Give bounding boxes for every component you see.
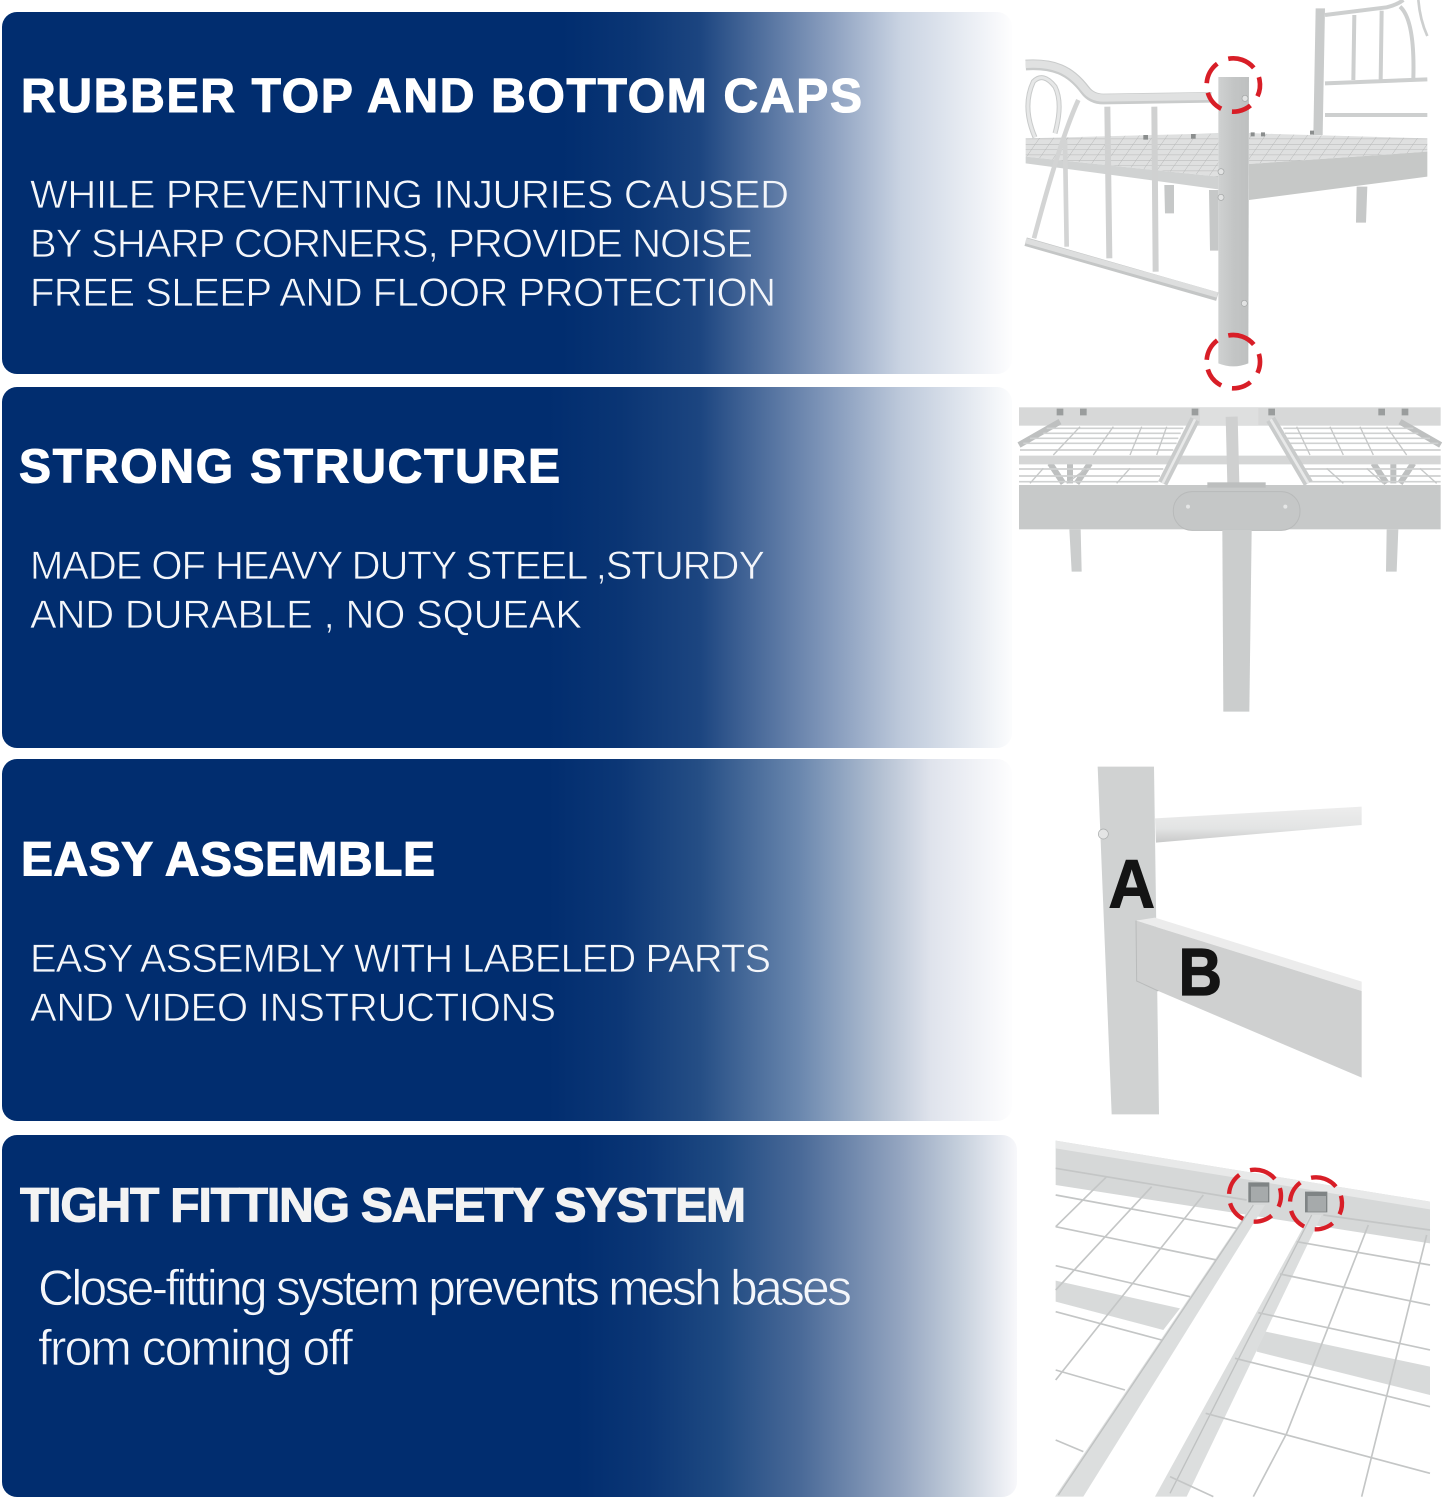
heading: rubber caps: RUBBER TOP AND BOTTOM CAPS (21, 70, 862, 123)
text block: strong structure description (30, 544, 765, 637)
text block: easy assemble description (30, 937, 771, 1030)
heading: easy assemble: EASY ASSEMBLE (21, 834, 435, 886)
label B: B (1179, 936, 1222, 1010)
callout: left slot dashed circle (1225, 1165, 1285, 1226)
text block: rubber caps description: WHILE PREVENTING INJURIES CAUSED (30, 173, 789, 217)
callout: right slot dashed circle (1286, 1173, 1346, 1234)
label A: A (1108, 847, 1155, 923)
illustration: center support frame (1019, 407, 1441, 712)
heading: tight fitting safety system: TIGHT FITTING SAFETY SYSTEM (20, 1180, 746, 1232)
illustration: mesh base fitting slots (1055, 1141, 1430, 1497)
text block: tight fitting description: Close-fitting system prevents mesh bases (38, 1260, 852, 1316)
callout: top cap dashed circle (1202, 54, 1265, 116)
text block: easy assemble description: EASY ASSEMBLY WITH LABELED PARTS (30, 937, 771, 981)
text block: tight fitting description: from coming off (38, 1320, 353, 1376)
text block: rubber caps description: FREE SLEEP AND FLOOR PROTECTION (30, 271, 776, 315)
panel: strong structure (2, 387, 1012, 748)
post bolts (1218, 95, 1248, 306)
text block: strong structure description: MADE OF HEAVY DUTY STEEL ,STURDY (30, 544, 765, 588)
text block: strong structure description: AND DURABLE , NO SQUEAK (30, 593, 582, 637)
panel: rubber top and bottom caps (2, 12, 1012, 374)
panel: easy assemble (2, 759, 1012, 1121)
illustration: labeled parts A and B (1098, 767, 1362, 1114)
text block: easy assemble description: AND VIDEO INSTRUCTIONS (30, 986, 556, 1030)
panel: tight fitting safety system (2, 1135, 1017, 1497)
text block: tight fitting description (38, 1260, 852, 1376)
callout: bottom cap dashed circle (1202, 330, 1265, 393)
text block: rubber caps description (30, 173, 789, 315)
heading: strong structure: STRONG STRUCTURE (19, 440, 560, 494)
text block: rubber caps description: BY SHARP CORNERS, PROVIDE NOISE (30, 222, 753, 266)
mounting plate (1173, 492, 1300, 530)
illustration: bed corner with caps (1026, 0, 1427, 393)
